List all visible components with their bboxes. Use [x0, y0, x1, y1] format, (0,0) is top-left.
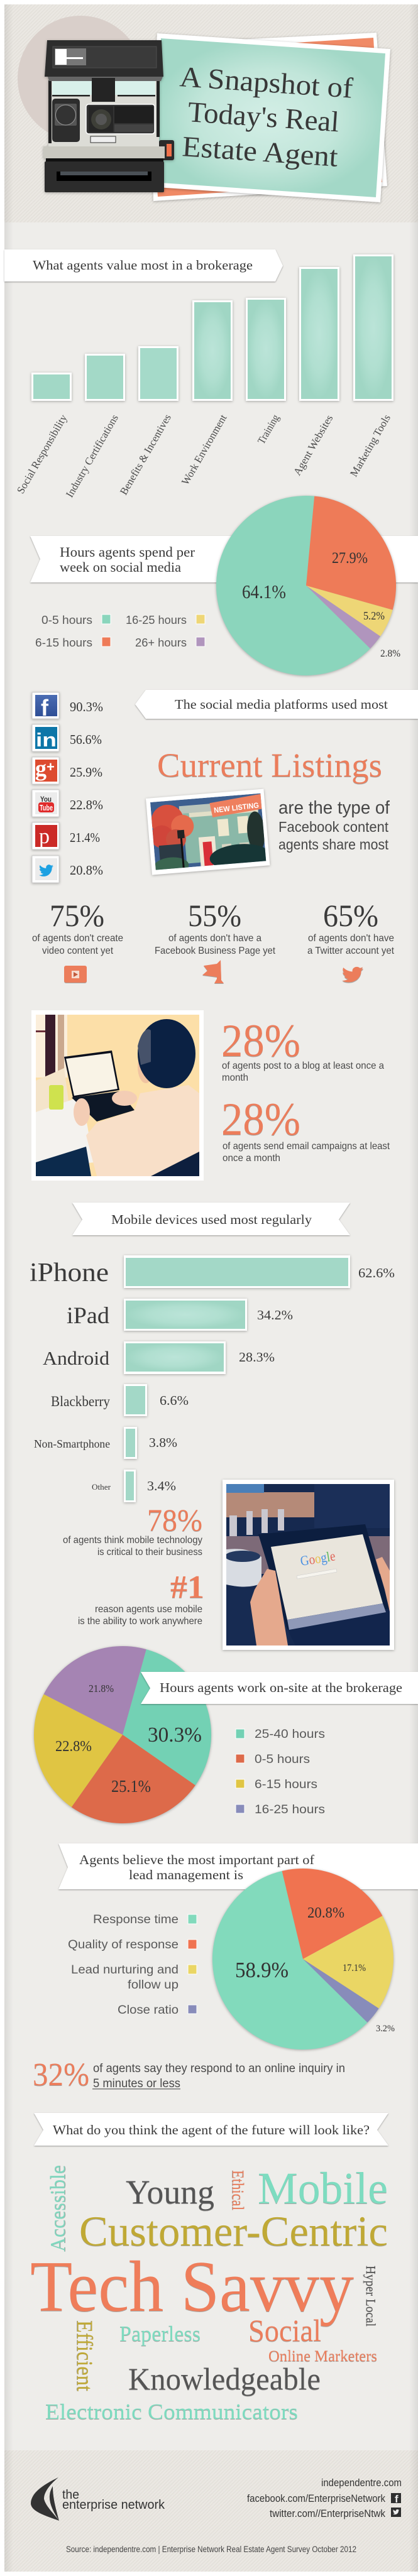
text: facebook content: are the type of — [278, 798, 390, 818]
word cloud: Paperless — [119, 2322, 201, 2346]
stat: number one reason: is the ability to work anywhere — [78, 1616, 202, 1627]
bar labels: Training — [255, 412, 282, 446]
word cloud: Tech Savvy — [30, 2247, 354, 2327]
bar labels: Industry Certifications — [63, 412, 121, 499]
stat: number one reason: reason agents use mobile — [95, 1604, 202, 1615]
bar labels — [14, 412, 393, 499]
legend — [35, 614, 205, 649]
legend: 16-25 hours — [126, 614, 187, 626]
title: Today's Real — [187, 96, 340, 138]
stat: mobile technology: is critical to their business — [97, 1547, 202, 1558]
icon: linkedin — [32, 724, 59, 751]
bar chart: mobile devices: Android — [43, 1347, 110, 1369]
word cloud: Knowledgeable — [128, 2361, 321, 2396]
legend: Quality of response — [68, 1938, 179, 1951]
icon: google plus: + — [47, 759, 55, 775]
icon: flag — [202, 960, 224, 983]
pie chart: 58.9% — [235, 1958, 289, 1982]
word cloud: Young — [126, 2173, 214, 2211]
ribbon heading: week on social media — [60, 559, 181, 575]
ribbon heading: Hours agents work on-site at the brokerage — [160, 1680, 402, 1695]
bar chart: mobile devices: iPad — [67, 1303, 110, 1329]
stat: video content: 75% — [50, 898, 104, 933]
stat: twitter account: a Twitter account yet — [307, 946, 395, 956]
stat: mobile technology — [63, 1502, 202, 1558]
ribbon heading: lead management is — [129, 1867, 243, 1882]
legend: 16-25 hours — [255, 1803, 325, 1816]
source line: Source: independentre.com | Enterprise Network Real Estate Agent Survey October 2012 — [66, 2545, 356, 2554]
word cloud: Efficient — [72, 2320, 97, 2391]
section: hours on-site — [34, 1646, 418, 1823]
stat: blog: of agents post to a blog at least once a — [222, 1061, 384, 1071]
bar labels: Agent Websites — [291, 413, 335, 478]
pie chart: 20.8% — [307, 1905, 344, 1921]
ribbon heading — [141, 1672, 418, 1704]
text: facebook content — [278, 798, 390, 853]
back photo card — [149, 33, 387, 201]
icon: facebook: f — [41, 695, 49, 721]
contact links — [247, 2477, 402, 2519]
bar chart: mobile devices: 3.4% — [147, 1478, 176, 1493]
word cloud: Social — [248, 2313, 321, 2348]
legend: Response time — [93, 1913, 179, 1926]
legend — [236, 1728, 325, 1816]
ribbon heading — [135, 690, 418, 719]
pie chart: 2.8% — [380, 648, 400, 659]
icon: pinterest: p — [39, 825, 50, 848]
icon: youtube — [32, 790, 59, 817]
title: Estate Agent — [181, 130, 339, 173]
text: facebook content: agents share most — [278, 836, 389, 853]
icon: twitter — [32, 856, 59, 883]
footer — [31, 2477, 402, 2554]
legend: 26+ hours — [135, 636, 187, 649]
bar chart: mobile devices: iPhone — [30, 1258, 109, 1287]
bar chart: mobile devices: 3.8% — [149, 1435, 177, 1450]
logo: the enterprise network — [31, 2477, 165, 2521]
stat: facebook business page: 55% — [188, 898, 241, 933]
stat: online inquiry response: 5 minutes or less — [93, 2077, 180, 2090]
stat: mobile technology: of agents think mobile technology — [63, 1535, 202, 1546]
stat: pinterest: 21.4% — [70, 830, 100, 845]
bar chart — [14, 254, 393, 499]
stat: twitter account — [307, 898, 395, 982]
ribbon heading — [4, 249, 283, 281]
stat: facebook business page: Facebook Business Page yet — [155, 946, 276, 956]
stat: linkedin: 56.6% — [70, 732, 102, 747]
ribbon heading: What agents value most in a brokerage — [33, 258, 253, 273]
stat: email: 28% — [221, 1094, 300, 1145]
pie chart — [212, 1869, 395, 2049]
section: lead management — [58, 1843, 418, 2049]
photo: man at laptop — [31, 1010, 204, 1181]
word cloud: Online Marketers — [268, 2348, 377, 2365]
stat: youtube: 22.8% — [70, 797, 103, 812]
bar chart: mobile devices — [30, 1255, 395, 1502]
ribbon heading: agent of the future — [34, 2113, 388, 2146]
pie chart: 3.2% — [376, 2024, 395, 2034]
logo: the enterprise network: enterprise network — [62, 2498, 165, 2512]
stat: twitter account: 65% — [323, 898, 378, 933]
icon: video — [64, 966, 87, 983]
photo: new listing house: NEW LISTING — [213, 800, 260, 815]
stat: mobile technology: 78% — [147, 1502, 202, 1537]
icon: instant camera — [43, 40, 174, 192]
bar chart: mobile devices: 62.6% — [358, 1265, 395, 1280]
pie chart: 27.9% — [332, 550, 368, 567]
bar chart: mobile devices: Other — [92, 1482, 111, 1492]
icon: google plus — [32, 756, 59, 784]
contact links: f — [395, 2493, 399, 2505]
stat: online inquiry response — [33, 2057, 345, 2093]
stat: email — [221, 1094, 390, 1164]
text: facebook content: Facebook content — [278, 819, 389, 835]
pie chart: 25.1% — [111, 1777, 151, 1796]
stat: facebook business page — [155, 898, 276, 983]
ribbon heading: mobile devices: Mobile devices used most regularly — [111, 1212, 312, 1227]
ribbon heading: Agents believe the most important part of — [79, 1852, 314, 1867]
icon: youtube: You — [40, 795, 52, 804]
ribbon heading: Hours agents spend per — [60, 544, 195, 560]
legend — [68, 1913, 197, 2017]
pie chart: 17.1% — [343, 1963, 366, 1973]
stat: number one reason — [78, 1569, 204, 1627]
stat: twitter: 20.8% — [70, 863, 103, 878]
legend: 0-5 hours — [41, 614, 92, 626]
word cloud: Ethical — [229, 2170, 247, 2210]
legend: 25-40 hours — [255, 1728, 325, 1741]
photo: new listing house — [146, 789, 271, 876]
stat: online inquiry response: of agents say they respond to an online inquiry in — [93, 2062, 345, 2075]
legend: 0-5 hours — [255, 1753, 310, 1766]
legend: Lead nurturing and — [71, 1963, 179, 1977]
contact links: independentre.com — [321, 2477, 402, 2489]
word cloud: Customer-Centric — [79, 2207, 388, 2255]
section: hours on social media — [30, 496, 418, 675]
icon: youtube: Tube — [40, 803, 53, 812]
icon: twitter bird — [342, 967, 363, 982]
legend: follow up — [128, 1978, 179, 1992]
stat: facebook business page: of agents don't have a — [168, 933, 261, 944]
bar labels: Social Responsibility — [14, 412, 70, 496]
ribbon heading: mobile devices — [72, 1203, 350, 1235]
stat: number one reason: #1 — [170, 1569, 204, 1605]
ribbon heading — [58, 1843, 418, 1889]
stat: blog — [221, 1015, 384, 1083]
backdrop circle — [18, 16, 143, 141]
stat: google plus: 25.9% — [70, 765, 102, 780]
pie chart: 22.8% — [55, 1738, 92, 1755]
contact links: twitter.com//EnterpriseNtwk — [270, 2508, 385, 2519]
header: camera and title card — [18, 16, 390, 202]
contact links: facebook.com/EnterpriseNetwork — [247, 2492, 385, 2504]
stat: blog: month — [222, 1072, 248, 1083]
front photo card — [147, 33, 390, 202]
icon: linkedin: in — [36, 729, 57, 751]
ribbon heading: The social media platforms used most — [175, 697, 388, 712]
legend: 6-15 hours — [255, 1778, 317, 1791]
stat: facebook: 90.3% — [70, 699, 103, 714]
ribbon heading: agent of the future: What do you think the agent of the future will look like? — [53, 2122, 370, 2137]
photo: tablet with google: Google — [299, 1547, 336, 1569]
bar chart: mobile devices: Blackberry — [51, 1394, 110, 1409]
word cloud: Hyper Local — [363, 2266, 378, 2327]
section: what agents value — [4, 249, 393, 499]
bar chart: mobile devices: 34.2% — [257, 1307, 293, 1323]
section: social media platforms — [32, 690, 418, 883]
heading: current listings: Current Listings — [157, 746, 382, 784]
stat: email: once a month — [223, 1153, 280, 1164]
stat: blog: 28% — [221, 1015, 300, 1067]
icon: facebook — [32, 692, 59, 721]
stat: email: of agents send email campaigns at least — [223, 1141, 390, 1152]
pie chart: 30.3% — [148, 1723, 202, 1747]
photo: tablet with google — [223, 1480, 394, 1650]
title: A Snapshot of — [179, 60, 355, 104]
bar chart: mobile devices: Non-Smartphone — [34, 1438, 110, 1450]
legend: 6-15 hours — [35, 636, 92, 649]
word cloud — [30, 2163, 388, 2424]
bar labels: Work Environment — [179, 412, 229, 487]
bar labels: Marketing Tools — [348, 412, 393, 479]
stat: online inquiry response: 32% — [33, 2057, 89, 2093]
stat: video content: video content yet — [42, 946, 114, 956]
bar labels: Benefits & Incentives — [118, 412, 173, 497]
bar chart: mobile devices: 6.6% — [160, 1393, 189, 1408]
pie chart: 21.8% — [89, 1683, 114, 1695]
word cloud: Mobile — [258, 2163, 388, 2213]
title — [179, 60, 355, 173]
pie chart: 5.2% — [363, 609, 385, 622]
stat: video content — [32, 898, 123, 983]
logo: the enterprise network: the — [62, 2488, 79, 2502]
pie chart: 64.1% — [242, 581, 286, 603]
legend: Close ratio — [118, 2004, 179, 2017]
pie chart — [34, 1646, 211, 1823]
ribbon heading — [30, 536, 418, 582]
bar chart: mobile devices: 28.3% — [239, 1350, 275, 1365]
pie chart — [216, 496, 400, 675]
word cloud: Accessible — [47, 2165, 70, 2252]
icon: google plus: g — [35, 756, 47, 781]
stat: twitter account: of agents don't have — [308, 933, 394, 944]
word cloud: Electronic Communicators — [45, 2399, 298, 2424]
icon: pinterest — [32, 822, 59, 849]
stat: video content: of agents don't create — [32, 933, 123, 944]
